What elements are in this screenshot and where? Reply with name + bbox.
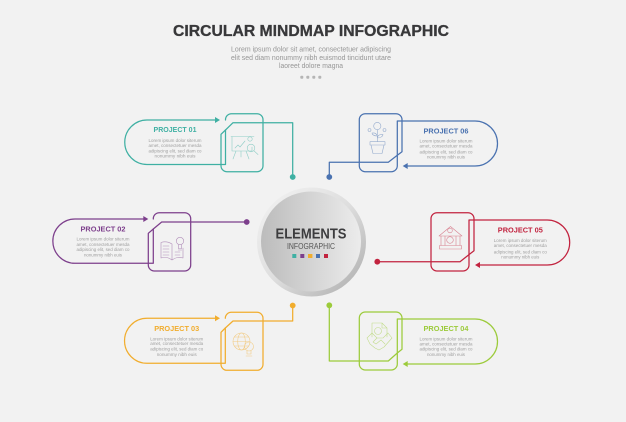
project 05 body: adipiscing elit, sed diam co bbox=[494, 249, 547, 255]
project 03 body: adipiscing elit, sed diam co bbox=[150, 346, 204, 352]
project 03 arrow bbox=[215, 315, 220, 321]
project 02 body: nonummy nibh euis bbox=[84, 252, 123, 258]
project 06 body: Lorem ipsum dolor siterum bbox=[420, 138, 472, 144]
project 05 body: nonummy nibh euis bbox=[501, 254, 540, 260]
project 02 body: amet, consectetuer mesda bbox=[76, 242, 130, 248]
project 02 icon bbox=[161, 237, 184, 260]
project 03 document frame bbox=[221, 312, 263, 370]
project 03 body bbox=[150, 336, 204, 358]
project 05 body: amet, consectetuer mesda bbox=[494, 243, 547, 249]
project 04 icon bbox=[367, 323, 392, 350]
project 04 dot bbox=[326, 302, 332, 308]
project 03 icon bbox=[233, 333, 254, 356]
project 05 icon bbox=[439, 226, 462, 249]
subtitle text: laoreet dolore magna bbox=[279, 63, 343, 70]
project 01 connector frame bbox=[125, 120, 293, 177]
project 01 dot bbox=[290, 174, 296, 180]
project 03 dot bbox=[290, 303, 296, 308]
project 01 body: nonummy nibh euis bbox=[154, 154, 196, 160]
outer ring bbox=[257, 188, 366, 296]
project 02 arrow bbox=[143, 216, 148, 222]
project 03 heading: PROJECT 03 bbox=[154, 324, 199, 333]
project 02 heading: PROJECT 02 bbox=[80, 224, 126, 233]
inner disc bbox=[261, 192, 361, 292]
project 02 connector line bbox=[53, 219, 247, 263]
project 02 document frame bbox=[148, 213, 191, 271]
project 03 body: amet, consectetuer mesda bbox=[150, 341, 204, 347]
project 04 arrow bbox=[403, 361, 408, 367]
panel: project 04 bbox=[326, 302, 498, 370]
project 06 icon bbox=[368, 122, 386, 154]
project 04 heading: PROJECT 04 bbox=[424, 324, 469, 333]
project 05 body bbox=[494, 238, 547, 260]
project 04 body: adipiscing elit, sed diam co bbox=[420, 346, 473, 352]
subtitle text: elit sed diam nonummy nibh euismod tincidunt utare bbox=[231, 55, 391, 62]
project 04 document frame bbox=[359, 312, 402, 370]
project 02 body: adipiscing elit, sed diam co bbox=[76, 247, 130, 253]
project 05 heading: PROJECT 05 bbox=[498, 226, 543, 235]
project 06 body bbox=[420, 138, 473, 161]
panel: project 06 bbox=[326, 114, 498, 180]
project 01 document frame bbox=[221, 114, 263, 172]
panel: project 05 bbox=[374, 213, 570, 271]
project 06 body: adipiscing elit, sed diam co bbox=[420, 149, 473, 155]
project 06 connector frame bbox=[329, 121, 498, 177]
project 01 body: Lorem ipsum dolor siterum bbox=[148, 138, 202, 144]
project 02 body bbox=[76, 237, 130, 258]
centre subheading: INFOGRAPHIC bbox=[287, 242, 335, 251]
project 02 dot bbox=[244, 219, 250, 225]
panel: project 02 bbox=[53, 213, 250, 271]
project 01 arrow bbox=[215, 117, 220, 123]
project 01 body bbox=[148, 138, 202, 160]
project 05 body: Lorem ipsum dolor siterum bbox=[494, 238, 547, 244]
centre heading: ELEMENTS bbox=[276, 226, 346, 242]
project 05 arrow bbox=[475, 262, 480, 268]
project 04 body: nonummy nibh euis bbox=[427, 352, 466, 358]
project 04 body: Lorem ipsum dolor siterum bbox=[420, 336, 472, 342]
panel: project 03 bbox=[125, 303, 296, 370]
title: CIRCULAR MINDMAP INFOGRAPHIC bbox=[173, 23, 449, 40]
decorative dots under subtitle bbox=[300, 76, 321, 79]
project 05 document frame bbox=[431, 213, 474, 271]
colour squares bbox=[292, 254, 328, 258]
project 06 arrow bbox=[403, 163, 408, 169]
project 06 body: nonummy nibh euis bbox=[427, 155, 466, 161]
central circle bbox=[257, 188, 366, 296]
subtitle text: Lorem ipsum dolor sit amet, consectetuer adipiscing bbox=[231, 46, 391, 54]
project 01 icon bbox=[231, 136, 258, 159]
project 04 body bbox=[420, 336, 473, 358]
project 05 dot bbox=[374, 259, 380, 265]
project 06 heading: PROJECT 06 bbox=[424, 126, 468, 135]
project 01 body: adipiscing elit, sed diam co bbox=[148, 148, 202, 154]
project 04 body: amet, consectetuer mesda bbox=[420, 341, 473, 347]
project 01 heading: PROJECT 01 bbox=[154, 125, 196, 134]
panel: project 01 bbox=[125, 114, 296, 180]
project 06 body: amet, consectetuer mesda bbox=[420, 143, 473, 149]
project 06 document frame bbox=[359, 114, 402, 172]
project 04 connector frame bbox=[329, 305, 498, 364]
project 01 body: amet, consectetuer mesda bbox=[148, 143, 202, 149]
project 03 connector frame bbox=[125, 306, 293, 363]
project 06 dot bbox=[326, 174, 332, 180]
project 03 body: Lorem ipsum dolor siterum bbox=[150, 336, 203, 342]
project 03 body: nonummy nibh euis bbox=[157, 352, 197, 358]
project 05 connector frame bbox=[377, 220, 570, 265]
subtitle text bbox=[231, 46, 391, 70]
project 02 body: Lorem ipsum dolor siterum bbox=[76, 237, 130, 243]
